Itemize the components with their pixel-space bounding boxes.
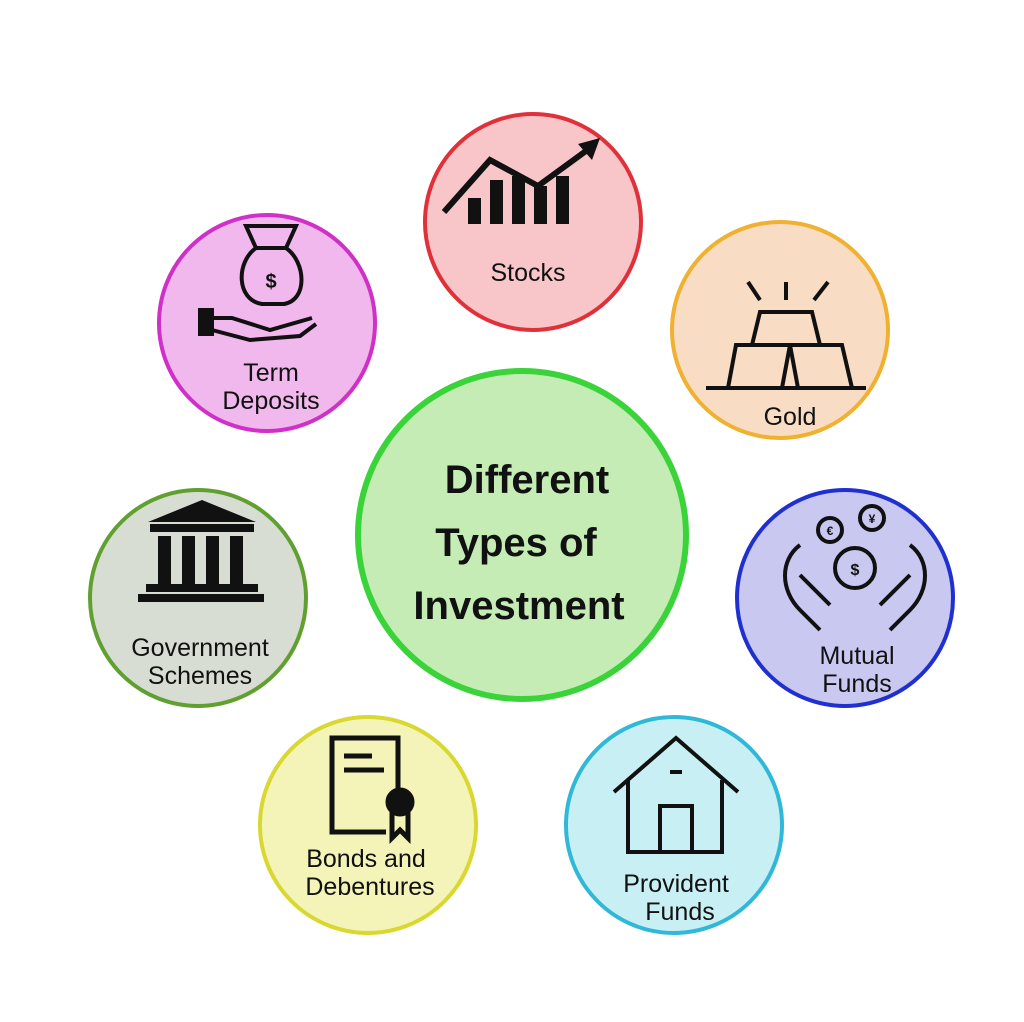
icon: money bag in hand <box>200 226 316 340</box>
title: Different <box>445 458 609 502</box>
title: Types of <box>435 521 597 565</box>
label: bonds and debentures <box>305 845 435 901</box>
panel: mutual funds: $ <box>851 562 860 579</box>
icon: house <box>614 738 738 852</box>
label: provident funds: Provident <box>623 870 729 898</box>
panel: gold <box>672 222 888 438</box>
icon: bar chart up <box>444 138 600 224</box>
label: provident funds: Funds <box>645 898 715 926</box>
label: term deposits: Deposits <box>222 387 320 415</box>
panel: mutual funds: ¥ <box>869 512 876 526</box>
panel: term deposits <box>159 215 375 431</box>
title <box>413 458 625 628</box>
icon: certificate <box>332 738 412 838</box>
label: bonds and debentures: Debentures <box>305 873 435 901</box>
label: term deposits <box>222 359 320 415</box>
icon: gold bars <box>706 282 866 388</box>
label: term deposits: Term <box>243 359 299 387</box>
panel: mutual funds: € <box>827 524 834 538</box>
label: gold: Gold <box>764 403 816 431</box>
label: stocks: Stocks <box>490 259 566 287</box>
label: bonds and debentures: Bonds and <box>306 845 426 873</box>
panel: mutual funds <box>737 490 953 706</box>
icon: government building <box>138 500 264 602</box>
panel: bonds and debentures <box>260 717 476 933</box>
label: government schemes: Schemes <box>148 662 252 690</box>
panel: stocks <box>425 114 641 330</box>
label: provident funds <box>623 870 729 926</box>
label: mutual funds <box>819 642 895 698</box>
label: government schemes <box>131 634 269 690</box>
label: mutual funds: Mutual <box>819 642 895 670</box>
central circle: title <box>358 371 686 699</box>
panel: term deposits: $ <box>265 271 277 293</box>
panel: government schemes <box>90 490 306 706</box>
icon: hands with coins <box>785 506 925 630</box>
title: Investment <box>413 584 625 628</box>
label: government schemes: Government <box>131 634 269 662</box>
panel: provident funds <box>566 717 782 933</box>
label: mutual funds: Funds <box>822 670 892 698</box>
